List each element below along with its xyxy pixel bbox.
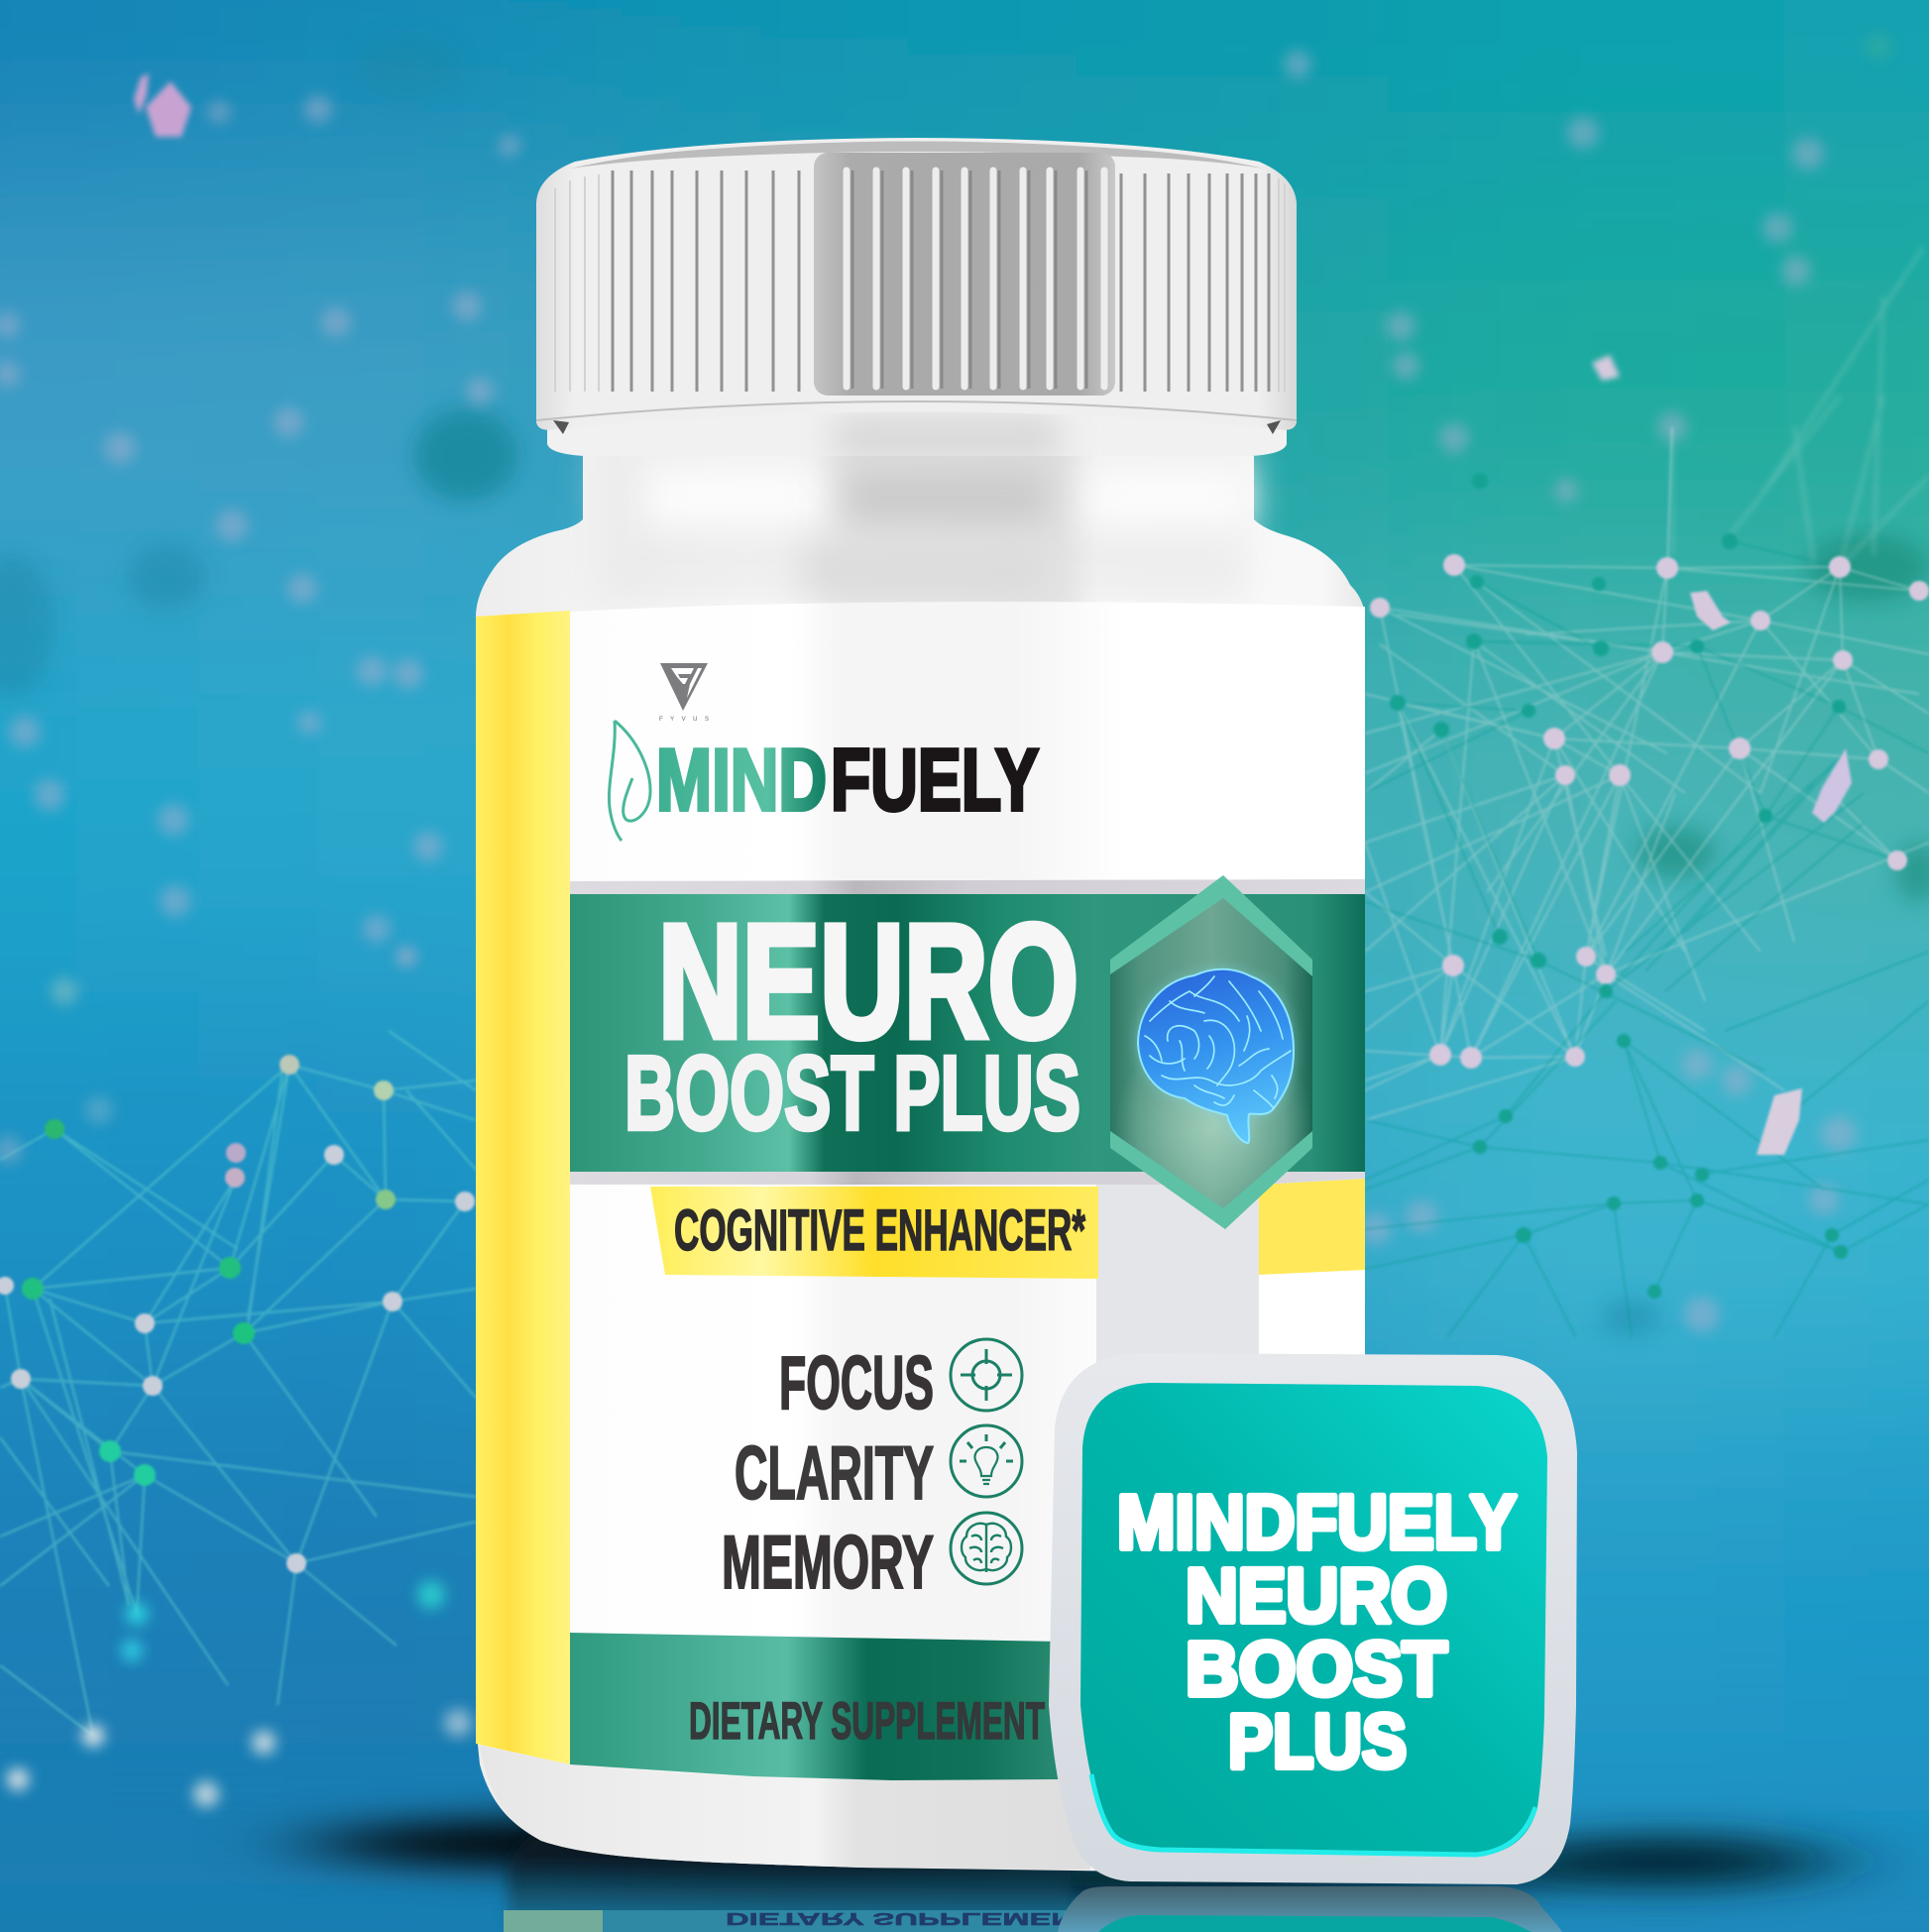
cognitive enhancer text: COGNITIVE ENHANCER* [674, 1198, 1085, 1263]
right yellow patch [1259, 1179, 1365, 1275]
dietary supplement text: DIETARY SUPPLEMENT [689, 1692, 1045, 1751]
icon: leaf [609, 721, 650, 841]
brand name MIND: MIND [656, 731, 827, 829]
product title BOOST PLUS: BOOST PLUS [624, 1035, 1080, 1152]
cap ribs right [1121, 173, 1269, 392]
badge line NEURO: NEURO [1186, 1553, 1447, 1639]
cap notch left [553, 420, 569, 434]
icon: pink crystal upper left [134, 73, 191, 137]
icon: fyvus triangle: FYVUS [659, 717, 709, 723]
cap notch right [1267, 420, 1281, 434]
grey pillar [1096, 1185, 1259, 1373]
bottom green band [570, 1633, 1061, 1780]
yellow stripe [476, 611, 570, 1764]
icon: clarity lightbulb [951, 1425, 1022, 1497]
cap shell [536, 138, 1297, 430]
product title NEURO: NEURO [658, 890, 1078, 1072]
brand name FUELY: FUELY [831, 731, 1039, 829]
badge rim [1049, 1353, 1577, 1884]
benefit CLARITY: CLARITY [735, 1431, 934, 1516]
neck shading [595, 436, 1249, 605]
icon: focus crosshair [951, 1339, 1022, 1411]
upper grey strip [570, 879, 1365, 894]
floor shadow [307, 1818, 1834, 1900]
lower grey strip [570, 1172, 1365, 1185]
lower bottle below label [480, 1746, 1090, 1870]
benefit FOCUS: FOCUS [779, 1341, 934, 1425]
network: left side [0, 1031, 476, 1736]
background: soft blobs [0, 34, 1929, 1335]
benefit MEMORY: MEMORY [722, 1521, 934, 1605]
main green band [570, 894, 1365, 1172]
icon: memory brain [951, 1513, 1022, 1584]
badge line BOOST: BOOST [1186, 1627, 1447, 1712]
icon: fyvus triangle [659, 663, 709, 723]
bottle body and shoulders [476, 456, 1365, 1874]
cap ribs centre [847, 170, 1104, 389]
bottle [476, 397, 1365, 1874]
reflected label text: DIETARY SUPPLEMENT [726, 1909, 1095, 1929]
cap dark centre panel [814, 153, 1115, 396]
network nodes: right side [1370, 355, 1929, 1299]
cap faint ribs far edges [555, 174, 1285, 392]
hexagon inner [1110, 898, 1312, 1208]
bottle reflection on floor [504, 1832, 1420, 1932]
network nodes: left side [0, 947, 475, 1807]
badge line PLUS: PLUS [1228, 1699, 1407, 1784]
badge line MINDFUELY: MINDFUELY [1117, 1480, 1517, 1565]
icon: blue brain with glow [1138, 969, 1294, 1143]
network: right side [1365, 248, 1929, 1337]
badge face bottom highlight [1091, 1774, 1535, 1855]
badge label [1117, 1480, 1517, 1784]
bottle cap [536, 138, 1297, 434]
badge reflection on floor [1058, 1886, 1562, 1932]
badge teal face [1080, 1383, 1547, 1857]
hexagon frame [1110, 875, 1312, 1229]
cap lower band line [536, 401, 1297, 420]
hexagon inner glow [1110, 898, 1312, 1208]
yellow ribbon [650, 1187, 1098, 1279]
cap top rim [570, 141, 1264, 169]
white label [570, 602, 1365, 1685]
brand logo [609, 663, 1039, 841]
collar under cap [547, 397, 1287, 456]
cap ribs left [613, 170, 799, 392]
badge [1049, 1353, 1577, 1884]
